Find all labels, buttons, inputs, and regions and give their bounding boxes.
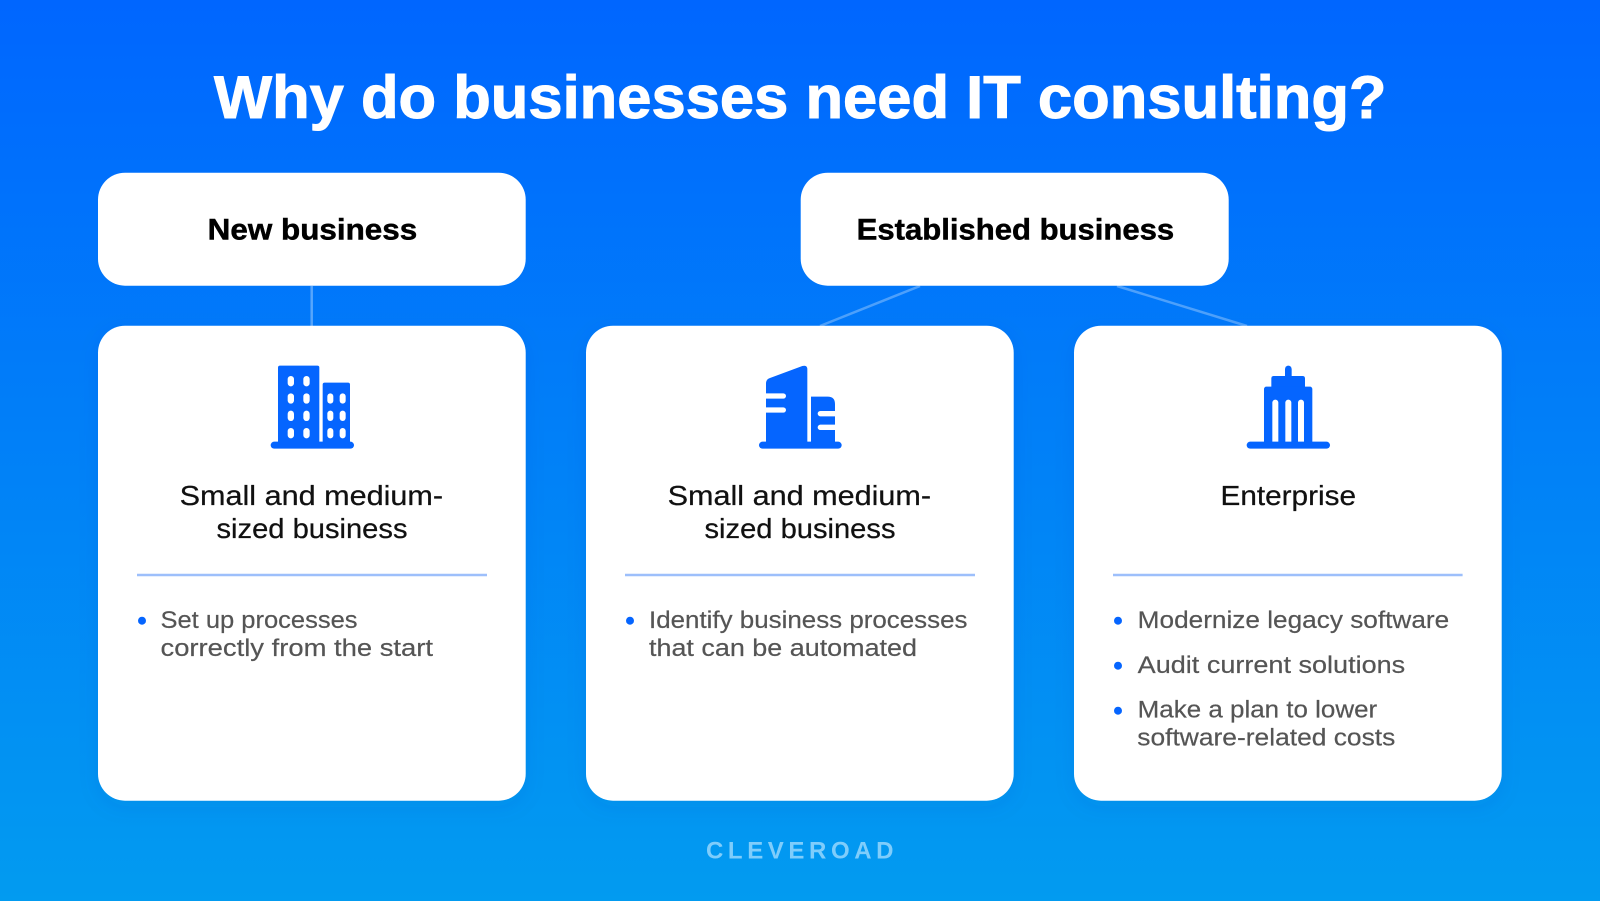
bullet list xyxy=(626,607,968,662)
category: established business xyxy=(801,173,1229,286)
bullet list xyxy=(1114,607,1449,752)
logo: Cleveroad wordmark: CLEVEROAD xyxy=(706,838,894,864)
bullet list: software-related costs xyxy=(1137,725,1395,752)
bullet list: correctly from the start xyxy=(160,635,433,662)
card heading: Enterprise xyxy=(1220,480,1356,511)
panel: established small and medium-sized business xyxy=(586,326,1014,801)
icon: two office buildings xyxy=(271,366,354,449)
bullet list: Audit current solutions xyxy=(1138,652,1405,679)
bullet list xyxy=(138,607,433,662)
connector: established business to enterprise card xyxy=(1117,286,1247,326)
card heading xyxy=(668,480,931,544)
panel: new small and medium-sized business xyxy=(98,326,526,801)
card heading xyxy=(180,480,443,544)
connector: established business to small and medium card xyxy=(820,286,920,326)
category: new business xyxy=(98,173,526,286)
bullet list: Modernize legacy software xyxy=(1138,607,1449,634)
title: Why do businesses need IT consulting? xyxy=(214,64,1386,131)
bullet list: that can be automated xyxy=(649,635,917,662)
category: established business: Established business xyxy=(857,213,1174,246)
card heading: sized business xyxy=(216,513,408,544)
card heading: Small and medium- xyxy=(180,480,443,511)
icon: angled office buildings xyxy=(759,366,842,449)
card heading: Small and medium- xyxy=(668,480,931,511)
icon: tower with columns xyxy=(1247,366,1330,449)
category: new business: New business xyxy=(208,213,417,246)
bullet list: Identify business processes xyxy=(649,607,968,634)
bullet list: Make a plan to lower xyxy=(1138,696,1377,724)
card heading: sized business xyxy=(704,513,896,544)
bullet list: Set up processes xyxy=(160,607,358,634)
panel: enterprise xyxy=(1074,326,1502,801)
connector: new business to card xyxy=(310,286,313,326)
